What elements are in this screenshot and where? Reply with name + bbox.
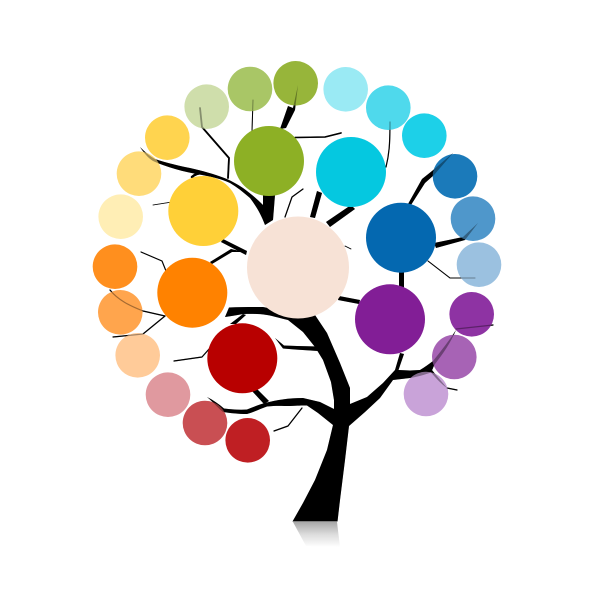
- branch tips showing through the small circles: [110, 85, 493, 522]
- trunk reflection: [293, 522, 340, 547]
- large circles: [157, 126, 436, 393]
- central circle: [247, 216, 349, 318]
- small circles ring: [93, 61, 501, 463]
- tree trunk and branches: [110, 85, 493, 522]
